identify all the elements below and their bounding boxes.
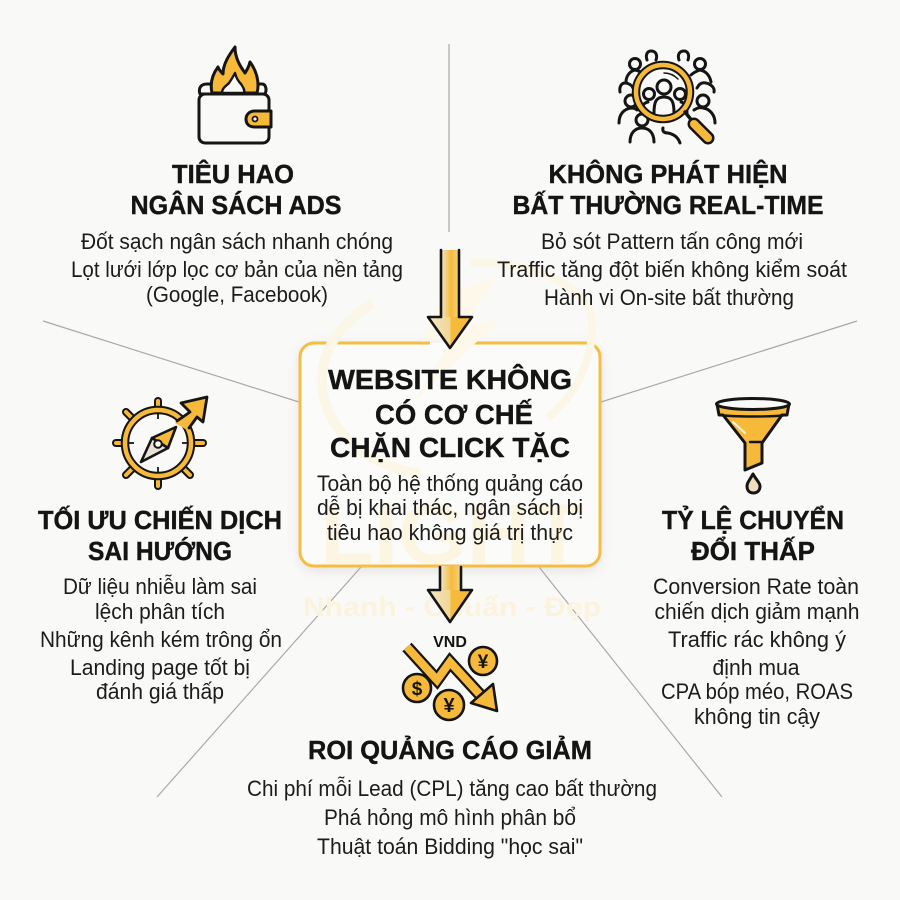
text: tiêu hao ngân sách: Lọt lưới lớp lọc cơ bản của nền tảng (71, 257, 403, 282)
text: tối ưu chiến dịch: Những kênh kém trông ổn (40, 627, 282, 652)
heading: không phát hiện: BẤT THƯỜNG REAL-TIME (512, 190, 824, 220)
text: tỷ lệ chuyển đổi: không tin cậy (694, 704, 820, 729)
central heading: WEBSITE KHÔNG (328, 363, 572, 395)
text: tối ưu chiến dịch (40, 574, 282, 704)
text: tỷ lệ chuyển đổi: CPA bóp méo, ROAS (661, 679, 853, 704)
text: tối ưu chiến dịch: Landing page tốt bị (70, 655, 250, 680)
watermark logo: Nhanh - Chuẩn - Đẹp (303, 592, 601, 622)
central text (317, 471, 583, 545)
text: không phát hiện: Traffic tăng đột biến không kiểm soát (497, 257, 847, 282)
central heading (328, 363, 572, 463)
text: roi quảng cáo giảm (247, 776, 657, 859)
text: roi quảng cáo giảm: Phá hỏng mô hình phân bổ (324, 805, 576, 830)
text: tối ưu chiến dịch: lệch phân tích (95, 599, 225, 624)
icon: funnel with drop (716, 398, 790, 493)
icon: compass with arrow (116, 397, 207, 486)
spoke dividers (43, 44, 857, 797)
heading: tiêu hao ngân sách: NGÂN SÁCH ADS (130, 190, 342, 220)
text: tiêu hao ngân sách (71, 229, 403, 307)
icon: falling currency chart: ¥ (443, 695, 455, 717)
arrow: card to ROI (428, 566, 472, 622)
heading: không phát hiện: KHÔNG PHÁT HIỆN (548, 159, 788, 189)
panel: central card (300, 343, 600, 570)
text: roi quảng cáo giảm: Chi phí mỗi Lead (CPL) tăng cao bất thường (247, 776, 657, 801)
heading: tỷ lệ chuyển đổi: TỶ LỆ CHUYỂN (662, 505, 844, 535)
heading: không phát hiện (512, 159, 824, 220)
icon: falling currency chart (403, 634, 497, 720)
central text: tiêu hao không giá trị thực (327, 520, 573, 545)
central text: Toàn bộ hệ thống quảng cáo (317, 471, 583, 496)
heading: tối ưu chiến dịch: TỐI ƯU CHIẾN DỊCH (38, 505, 282, 535)
text: không phát hiện (497, 229, 847, 310)
text: tỷ lệ chuyển đổi (653, 574, 860, 729)
icon: crowd under magnifier (619, 51, 715, 143)
icon: falling currency chart: VND (433, 634, 467, 651)
watermark logo (303, 262, 601, 622)
central text: dễ bị khai thác, ngân sách bị (317, 495, 583, 520)
heading: roi quảng cáo giảm: ROI QUẢNG CÁO GIẢM (308, 735, 592, 765)
text: tiêu hao ngân sách: Đốt sạch ngân sách nhanh chóng (81, 229, 393, 254)
heading: tỷ lệ chuyển đổi: ĐỔI THẤP (691, 536, 815, 566)
central heading: CÓ CƠ CHẾ (375, 399, 533, 430)
icon: burning wallet (199, 47, 271, 143)
arrow: top into card (428, 250, 472, 348)
icon: falling currency chart: ¥ (478, 652, 489, 673)
heading: tỷ lệ chuyển đổi (662, 505, 844, 566)
text: không phát hiện: Hành vi On-site bất thường (544, 285, 794, 310)
text: tối ưu chiến dịch: Dữ liệu nhiễu làm sai (63, 574, 257, 599)
text: tiêu hao ngân sách: (Google, Facebook) (146, 282, 328, 307)
central heading: CHẶN CLICK TẶC (330, 432, 570, 463)
icon: falling currency chart: $ (412, 679, 423, 700)
heading: tiêu hao ngân sách: TIÊU HAO (172, 159, 294, 189)
text: tỷ lệ chuyển đổi: Traffic rác không ý (668, 627, 846, 652)
text: tối ưu chiến dịch: đánh giá thấp (96, 679, 224, 704)
heading: tối ưu chiến dịch: SAI HƯỚNG (88, 536, 232, 566)
text: roi quảng cáo giảm: Thuật toán Bidding "học sai" (317, 834, 583, 859)
text: không phát hiện: Bỏ sót Pattern tấn công mới (541, 229, 803, 254)
heading: tiêu hao ngân sách (130, 159, 342, 220)
text: tỷ lệ chuyển đổi: Conversion Rate toàn (653, 574, 859, 599)
watermark logo: LIGHT (320, 487, 584, 581)
heading: tối ưu chiến dịch (38, 505, 282, 566)
text: tỷ lệ chuyển đổi: chiến dịch giảm mạnh (654, 599, 860, 624)
text: tỷ lệ chuyển đổi: định mua (712, 655, 800, 680)
